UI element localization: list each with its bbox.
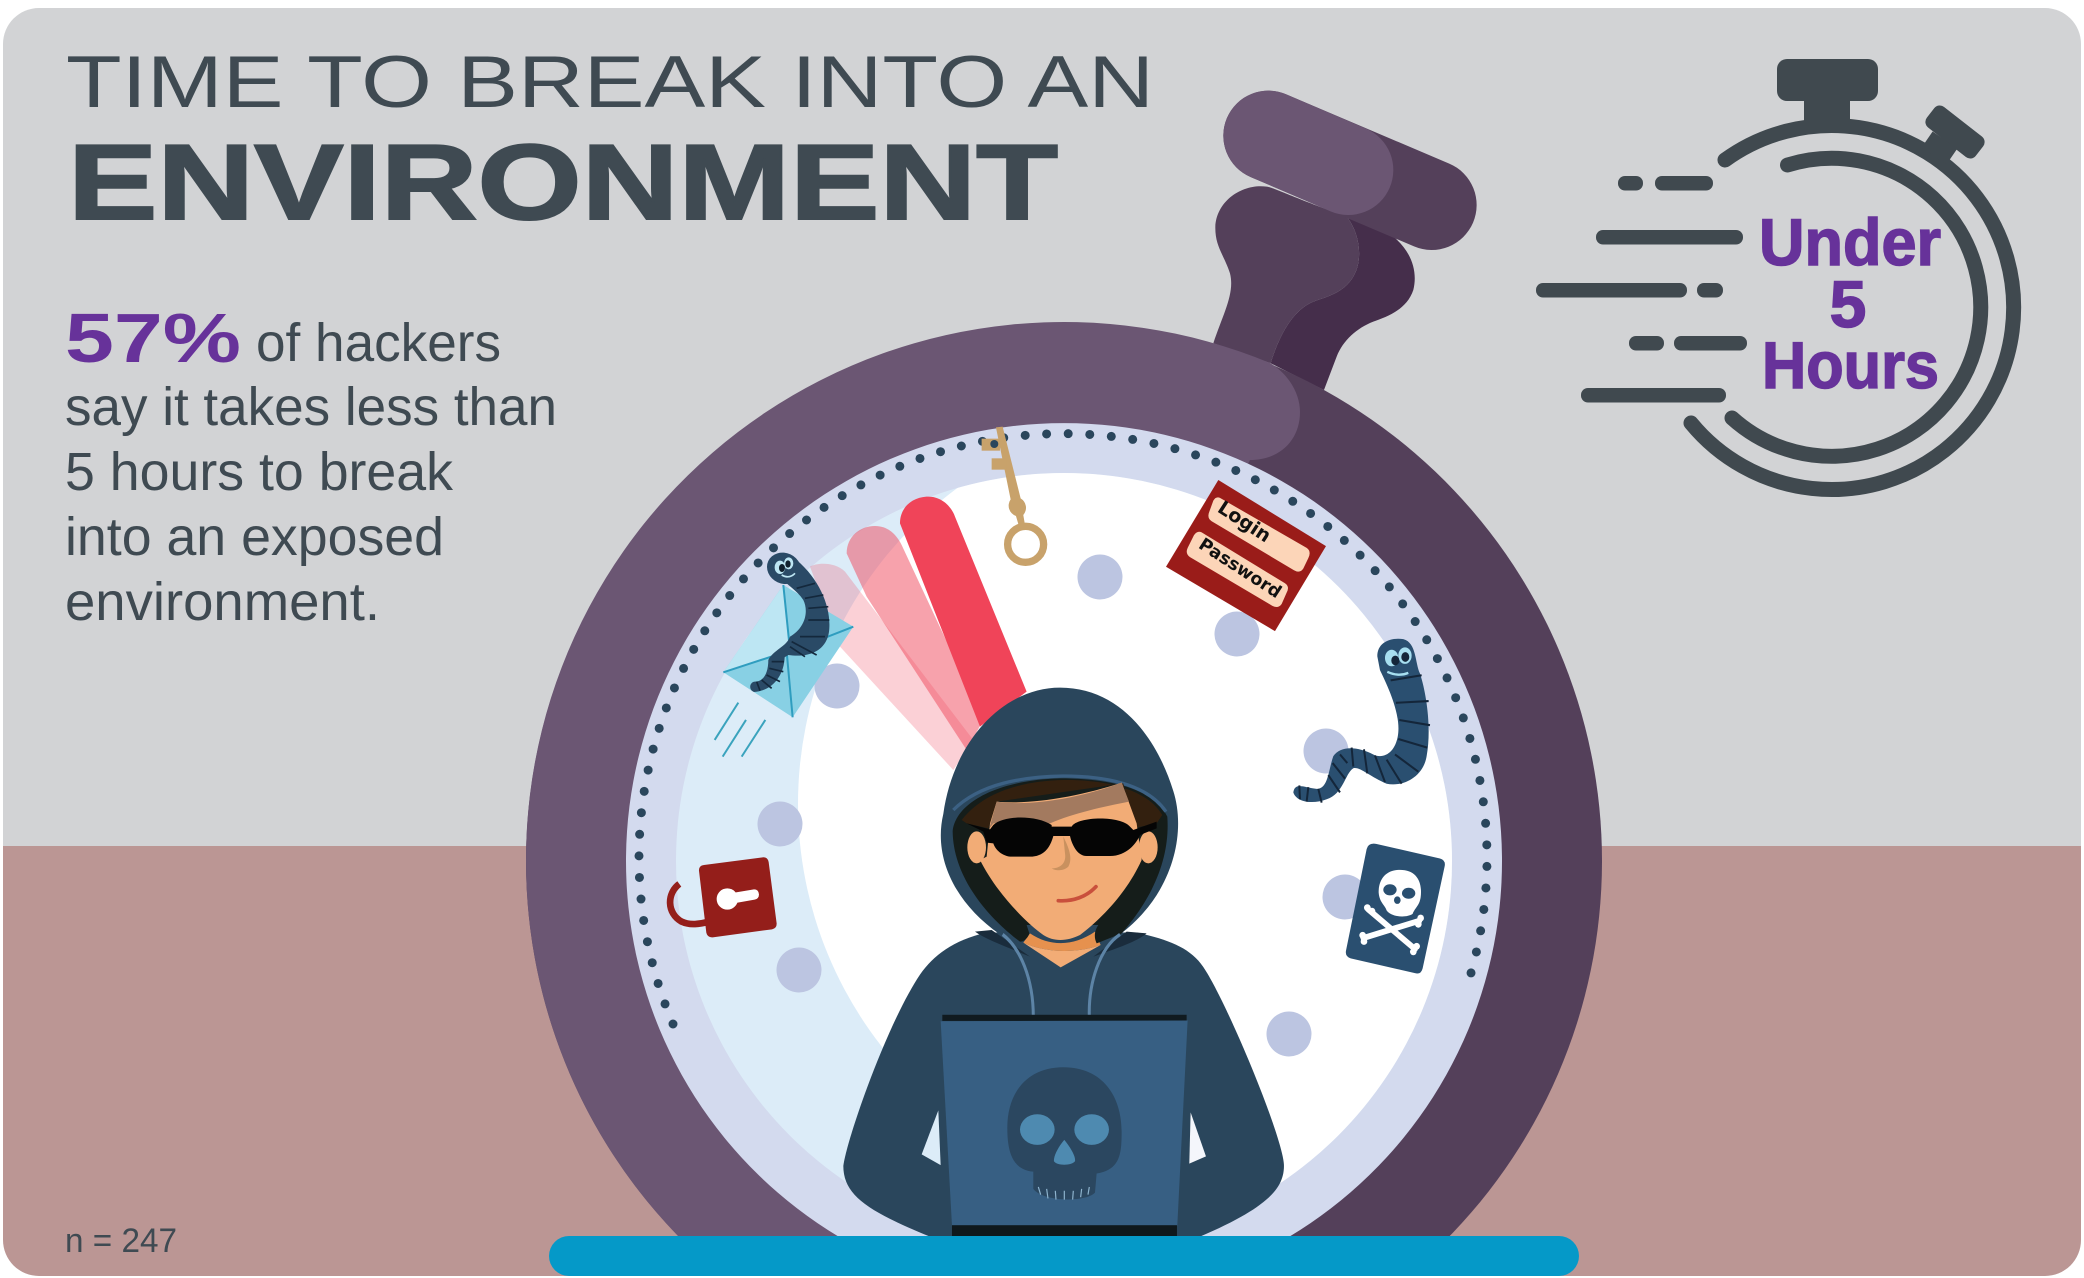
label line 2: 5: [1830, 267, 1866, 341]
face: [980, 783, 1142, 940]
stopwatch crown: [1213, 136, 1432, 390]
icon: skull card: [1346, 844, 1445, 974]
stat line 2: say it takes less than: [65, 377, 557, 437]
label line 3: Hours: [1762, 328, 1939, 402]
laptop skull: [1007, 1067, 1122, 1199]
forehead shadow: [989, 783, 1129, 828]
mouth: [1058, 887, 1096, 901]
hood interior: [953, 778, 1168, 943]
stat line 4: into an exposed: [65, 507, 444, 567]
stat line 5: environment.: [65, 572, 380, 632]
label line 1: Under: [1759, 205, 1941, 279]
sample size note: n = 247: [65, 1222, 177, 1260]
icon: key: [982, 427, 1044, 562]
ears: [967, 831, 1158, 863]
red speed needle fan: [810, 497, 1027, 770]
hoodie and hood: [843, 688, 1284, 1237]
login label: Login: [1214, 497, 1275, 547]
stopwatch face: [626, 423, 1502, 1236]
stopwatch body ring: [526, 322, 1602, 1270]
blue desk bar: [549, 1236, 1579, 1276]
speed lines: [1536, 176, 1747, 402]
sunglasses: [967, 817, 1157, 857]
icon: worm: [1293, 639, 1430, 803]
stopwatch buttons: [1777, 59, 1987, 161]
dotted tick ring: [639, 434, 1487, 1024]
hood rim: [953, 776, 1166, 812]
title line 2: ENVIRONMENT: [68, 122, 1058, 242]
stopwatch rings: [1691, 125, 2014, 489]
drawstrings and laptop: [941, 934, 1188, 1237]
head: [953, 776, 1168, 967]
under 5 hours label: [1759, 205, 1941, 402]
password label: Password: [1195, 535, 1285, 603]
57 percent: 57%: [65, 299, 241, 377]
statistic text block: [65, 299, 557, 632]
hair: [962, 780, 1162, 828]
stat line 3: 5 hours to break: [65, 442, 454, 502]
neck: [1023, 932, 1101, 967]
icon: envelope with worm: [715, 547, 853, 757]
title line 1: TIME TO BREAK INTO AN: [66, 42, 1154, 123]
nose: [1052, 837, 1070, 870]
icon: login form: [1166, 480, 1326, 631]
hacker illustration: [843, 688, 1284, 1237]
collar shadow: [975, 930, 1147, 957]
icon: open padlock: [670, 857, 777, 937]
icon: small stopwatch: [1536, 59, 2014, 489]
stat line 1: of hackers: [256, 313, 501, 373]
lavender dots: [758, 554, 1368, 1056]
